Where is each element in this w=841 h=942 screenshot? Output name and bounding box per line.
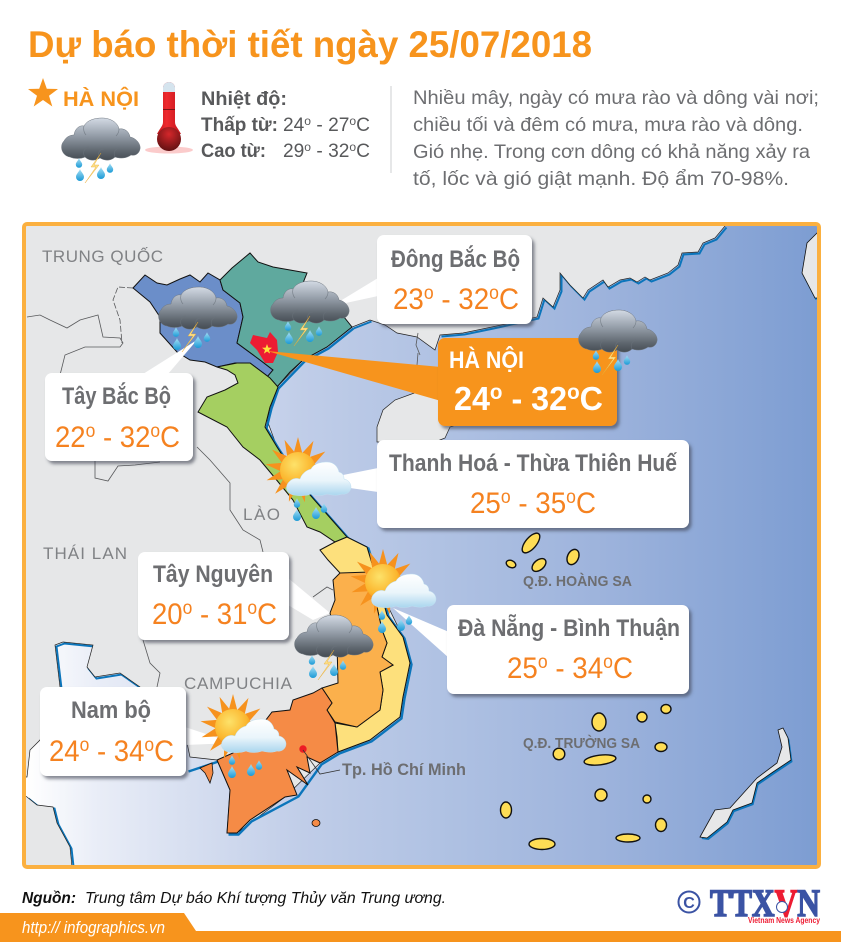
text: temperature: C: [356, 141, 370, 162]
land: north east corner: [802, 231, 819, 298]
logo: TTXVN: Vietnam News Agency: [748, 916, 820, 925]
callout: Hà Nội: - 32: [502, 380, 567, 417]
icon: storm Hà Nội: [579, 310, 657, 375]
callout: Thanh Hoá - Thừa Thiên Huế: o: [501, 487, 511, 508]
icon: star: [28, 78, 58, 106]
text: temperature: o: [304, 140, 311, 154]
text: temperature: C: [356, 115, 370, 136]
map labels: TRUNG QUỐC: [42, 246, 163, 266]
callout: Thanh Hoá - Thừa Thiên Huế: Thanh Hoá - Thừa Thiên Huế: [389, 450, 678, 477]
callout: Đông Bắc Bộ: Đông Bắc Bộ: [391, 245, 520, 273]
icon: storm Tây Nguyên: [295, 615, 373, 680]
callout: Tây Bắc Bộ: 22: [55, 421, 88, 454]
land: bottom left: [24, 795, 72, 867]
callout: Hà Nội: [267, 338, 617, 426]
map labels: [42, 246, 640, 752]
callout: Hà Nội: 24: [454, 380, 491, 417]
callout: Đà Nẵng - Bình Thuận: [393, 605, 689, 694]
icon: storm Đông Bắc: [271, 281, 349, 346]
callout: Đông Bắc Bộ: C: [499, 283, 519, 316]
callout: Đà Nẵng - Bình Thuận: C: [613, 652, 633, 685]
map labels: Q.Đ. TRƯỜNG SA: [523, 734, 640, 752]
text: temperature: o: [349, 140, 356, 154]
map labels: LÀO: [243, 505, 280, 524]
callout: Đà Nẵng - Bình Thuận: 25: [507, 652, 540, 685]
callout: Nam bộ: o: [144, 735, 154, 756]
map labels: Q.Đ. HOÀNG SA: [523, 573, 632, 590]
region: Đông Bắc: [220, 253, 352, 387]
callout: Tây Bắc Bộ: o: [150, 421, 160, 442]
callout: Tây Nguyên: - 31: [192, 598, 247, 631]
text: temperature: Thấp từ:: [201, 115, 278, 136]
region: Nam Trung Bộ: [320, 537, 410, 752]
callout: Hà Nội: HÀ NỘI: [449, 346, 524, 374]
land: surrounding countries: [24, 224, 725, 833]
marker: Tp. Hồ Chí Minh: Tp. Hồ Chí Minh: [342, 761, 466, 779]
text: temperature: 29: [283, 141, 304, 162]
panel: Hà Nội summary: [28, 78, 370, 183]
panel: map: [24, 224, 819, 867]
text: temperature: Cao từ:: [201, 141, 266, 162]
text block: forecast: chiều tối và đêm có mưa, mưa rào và dông.: [413, 114, 803, 136]
land borders: [27, 287, 420, 687]
region: Tây Nguyên: [322, 572, 393, 727]
icon: storm Tây Bắc: [159, 287, 237, 352]
icon: thermometer: [145, 82, 193, 154]
marker: Tp. Hồ Chí Minh: [299, 745, 466, 779]
source: Trung tâm Dự báo Khí tượng Thủy văn Trung ương.: [85, 890, 446, 907]
callout: Tây Nguyên: [138, 552, 330, 640]
icon: sun cloud Đà Nẵng: [350, 549, 436, 633]
map labels: THÁI LAN: [43, 544, 127, 563]
map frame: [24, 224, 819, 867]
footer bar: http:// infographics.vn: [22, 919, 165, 937]
callout: Tây Nguyên: 20: [152, 598, 185, 631]
callout: Đà Nẵng - Bình Thuận: o: [538, 652, 548, 673]
text block: forecast: Nhiều mây, ngày có mưa rào và dông vài nơi;: [413, 87, 819, 109]
island: Côn Đảo: [312, 820, 320, 826]
text: temperature: o: [349, 114, 356, 128]
islands: Hoàng Sa: [505, 530, 581, 574]
callout: Tây Nguyên: o: [247, 598, 257, 619]
callout: Thanh Hoá - Thừa Thiên Huế: o: [566, 487, 576, 508]
callout: Nam bộ: [40, 687, 233, 776]
coast shadow of Vietnam: [188, 328, 412, 834]
logo: TTXVN: C: [683, 895, 695, 912]
text: temperature: - 32: [311, 141, 349, 162]
callout: Đà Nẵng - Bình Thuận: Đà Nẵng - Bình Thuận: [458, 614, 680, 642]
region: Tây Bắc: [133, 273, 273, 378]
island: Palawan: [700, 728, 792, 840]
callout: Nam bộ: C: [154, 735, 174, 768]
callout: Tây Bắc Bộ: o: [86, 421, 95, 442]
callout: Tây Bắc Bộ: - 32: [95, 421, 150, 454]
callout: Tây Nguyên: Tây Nguyên: [153, 561, 273, 588]
text: temperature: o: [304, 114, 311, 128]
callout: Đà Nẵng - Bình Thuận: - 34: [548, 652, 603, 685]
region: Nam Bộ: [217, 688, 338, 833]
map labels: CAMPUCHIA: [184, 674, 293, 693]
icon: sun cloud Nam bộ: [200, 694, 286, 778]
callout: Thanh Hoá - Thừa Thiên Huế: - 35: [511, 487, 566, 520]
callout: Đông Bắc Bộ: [332, 235, 532, 324]
region: Hà Nội: [250, 332, 278, 363]
heading: Hà Nội: HÀ NỘI: [63, 87, 139, 111]
callout: Hà Nội: o: [490, 381, 502, 404]
callout: Đông Bắc Bộ: - 32: [434, 283, 489, 316]
callout: Hà Nội: C: [580, 380, 603, 417]
callout: Đà Nẵng - Bình Thuận: o: [603, 652, 613, 673]
text block: forecast: [413, 87, 819, 190]
callout: Nam bộ: o: [80, 735, 89, 756]
callout: Thanh Hoá - Thừa Thiên Huế: 25: [470, 487, 503, 520]
callout: Nam bộ: 24: [49, 735, 82, 768]
callout: Đông Bắc Bộ: o: [424, 283, 434, 304]
callout: Tây Bắc Bộ: Tây Bắc Bộ: [62, 382, 171, 410]
icon: sun cloud Thanh Hoá: [265, 437, 351, 521]
footer bar: [0, 913, 841, 942]
islands: Trường Sa: [500, 704, 671, 850]
callout: Tây Bắc Bộ: [45, 340, 197, 461]
callout: Đông Bắc Bộ: 23: [393, 283, 426, 316]
source: Nguồn:: [22, 890, 76, 907]
callout: Nam bộ: Nam bộ: [71, 697, 151, 724]
callout: Đông Bắc Bộ: o: [489, 283, 499, 304]
text: temperature: - 27: [311, 115, 349, 136]
text block: forecast: Gió nhẹ. Trong cơn dông có khả năng xảy ra: [413, 141, 810, 163]
callout: Thanh Hoá - Thừa Thiên Huế: [343, 440, 689, 528]
title: Dự báo thời tiết ngày 25/07/2018: [28, 24, 592, 65]
callout: Tây Nguyên: C: [257, 598, 277, 631]
callout: Nam bộ: - 34: [89, 735, 144, 768]
land: surrounding countries, coast shadow: [28, 228, 818, 866]
callout: Tây Bắc Bộ: C: [160, 421, 180, 454]
island: Phú Quốc: [200, 763, 213, 783]
text block: forecast: tố, lốc và gió giật mạnh. Độ ẩm 70-98%.: [413, 168, 789, 190]
callout: Thanh Hoá - Thừa Thiên Huế: C: [576, 487, 596, 520]
icon: storm cloud: [62, 118, 140, 183]
text: temperature: 24: [283, 115, 304, 136]
land: Hainan: [377, 392, 470, 442]
callout: Tây Nguyên: o: [183, 598, 192, 619]
sea: [24, 224, 819, 867]
logo: TTXVN: TTXVN: [710, 882, 820, 925]
region: Thanh Hoá - Thừa Thiên Huế: [198, 363, 347, 542]
text: temperature: Nhiệt độ:: [201, 89, 287, 110]
callout: Hà Nội: o: [567, 381, 580, 404]
text: temperature: [201, 89, 370, 162]
